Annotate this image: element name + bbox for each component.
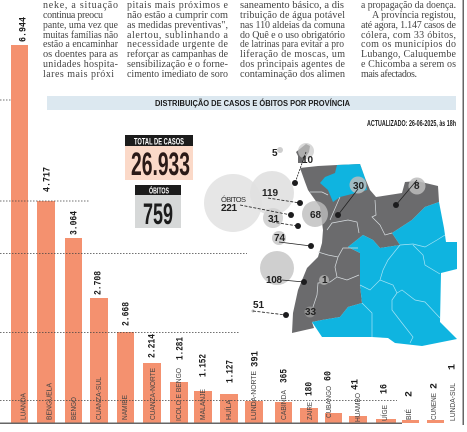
article text: column 2 [127,0,229,80]
heading band: DISTRIBUIÇÃO DE CASOS E ÓBITOS POR PROVÍNCIA [155,99,350,108]
map labels: 74 [274,233,286,244]
article text: column 4: até agora, 1.147 casos de [361,20,457,31]
bar values: 365 [280,369,290,383]
article text: column 2: não estão a cumprir com [127,10,228,21]
bar values: 3.064 [70,211,80,235]
Cabinda exclave [296,144,310,163]
article text: column 1: muitas famílias não [43,30,118,41]
bar categories: CABINDA [279,390,288,420]
bar values: 2 [430,383,440,389]
bar values: 41 [350,379,362,390]
article text: column 4: Lubango, Caluquembe [361,49,457,60]
article text: column 2: as medidas preventivas", [127,20,228,31]
map labels [221,148,420,318]
article text: column 3: liferação de moscas, um [240,49,345,60]
bar categories: HUÍLA [224,400,233,420]
map labels: 33 [305,307,317,318]
deaths box: ÓBITOS [149,184,169,196]
deaths box: 759 [143,198,173,231]
article text: column 1 [43,0,119,80]
article text: column 4: e Chicomba a serem os [361,59,456,70]
article text: column 4: a propagação da doença. [361,0,456,11]
article text: column 4: com os municípios do [361,39,456,50]
map labels: 5 [272,148,278,159]
article text: column 2: pitais mais próximos e [127,0,229,11]
article text: column 2: sensibilização e o forne- [127,59,228,70]
gridlines [0,100,397,400]
bar categories: ICOLO E BENGO [174,368,183,421]
article text: column 1: continua preocu [43,10,103,21]
article text: column 2: necessidade urgente de [127,39,229,50]
article text: column 1: lares mais próxi [43,69,114,80]
article text: column 3: dos principais agentes de [240,59,346,70]
article text: column 3: do Quê e o uso obrigatório [240,30,345,41]
bar categories: LUNDA-NORTE [249,371,258,420]
bar categories: LUNDA-SUL [448,383,457,421]
province borders [310,192,392,310]
article text: column 3 [240,0,346,80]
bar categories [18,368,457,422]
map labels: 30 [353,181,365,192]
bar values: 1.152 [198,354,210,377]
map labels: 10 [302,155,314,166]
map labels: 51 [253,300,265,311]
affected provinces [292,164,439,333]
map labels: 8 [414,181,420,192]
article text: column 3: tribuição de água potável [240,10,345,21]
article text: column 4 [361,0,457,80]
article text: column 4: mais afectados. [361,69,417,80]
map labels: 119 [262,188,278,199]
bar values: 1 [448,364,458,370]
bar values: 2.214 [148,334,158,358]
article text: column 1: unidades hospita- [43,59,118,70]
bar categories: ZAIRE [305,402,314,420]
unaffected provinces [320,164,367,202]
article text: column 3: nas 110 aldeias da comuna [240,20,346,31]
map labels: ÓBITOS [221,195,246,204]
bar values: 1.127 [226,360,236,383]
article text: column 1: pante, uma vez que [43,20,119,31]
article text: column 2: alertou, sublinhando a [127,30,229,41]
bar values: 180 [304,382,316,396]
bar categories: LUANDA [18,393,28,420]
article text: column 4: cólera, com 33 óbitos, [361,30,456,41]
bar categories: CUANZA-NORTE [148,368,157,420]
bar categories: BENGO [69,397,78,420]
total cases box: TOTAL DE CASOS [134,136,184,146]
map leader lines [240,152,417,315]
article text: column 3: contaminação dos alimen [240,69,345,80]
bar categories: CUANZA-SUL [94,377,103,420]
total cases box: 26.933 [131,146,190,182]
page right border [462,0,464,425]
bar categories: MALANJE [198,389,207,420]
article text: column 4: A província registou, [372,10,456,21]
map labels: 221 [221,203,237,214]
map of Angola [292,144,457,346]
bar values: 1.281 [176,337,186,360]
map labels: 1 [322,275,328,286]
map labels: 68 [310,210,322,221]
article text: column 1: os doentes para as [43,49,118,60]
bar values: 6.944 [18,17,30,42]
bar categories: BIÉ [404,409,413,420]
bar values: 391 [250,351,262,367]
article text: column 1: estão a encaminhar [43,39,119,50]
article text: column 2: cimento imediato de soro [127,69,228,80]
bar categories: HUAMBO [353,393,362,422]
bubbles on the map [298,143,426,318]
article text: column 1: neke, a situação [43,0,118,11]
bar values: 2.708 [94,271,104,295]
bar values: 4.717 [42,167,54,192]
bubbles outside the map [204,147,294,312]
bar values: 60 [324,371,334,381]
article text: column 2: reforçar as campanhas de [127,49,229,60]
article text: column 3: saneamento básico, a dis [240,0,344,11]
bar values: 16 [380,384,390,394]
bar categories: NAMIBE [120,395,129,420]
map location dots [283,180,399,318]
article text: column 3: de latrinas para evitar a pro [240,39,344,50]
total cases box [125,135,193,182]
bar values: 2.668 [122,302,132,326]
deaths box [135,184,181,231]
bar categories: UÍGE [380,405,389,421]
bar categories: CUBANGO [324,386,333,418]
map labels: 31 [268,214,280,225]
bar categories: CUNENE [429,393,438,420]
bar categories: BENGUELA [44,383,54,420]
heading band [47,96,456,110]
map labels: 108 [266,275,282,286]
bar values: 2 [404,391,416,397]
